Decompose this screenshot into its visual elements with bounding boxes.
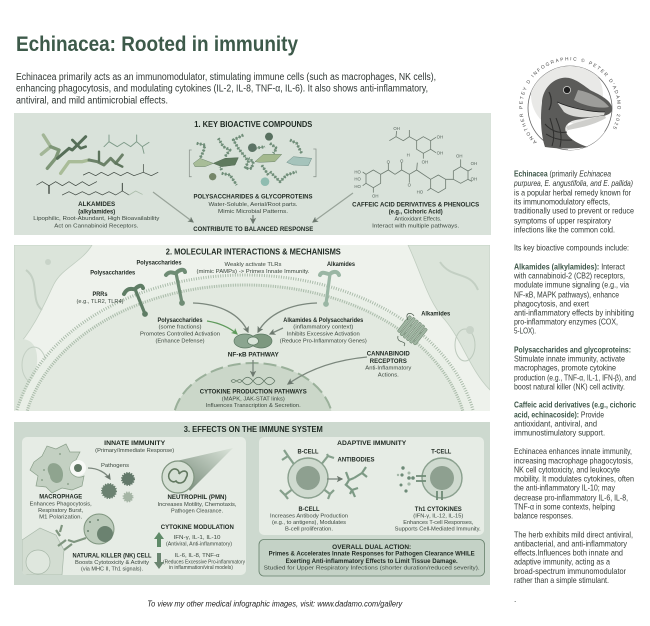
text: alkamides: pro-inflammatory enzymes (COX, xyxy=(514,317,618,327)
text: caffeic acid derivatives xyxy=(352,202,479,230)
text: receptor labels: PRRs xyxy=(92,292,108,298)
arrow: cannabinoid to cytokine xyxy=(288,357,367,384)
intro text: antiviral, and mild antimicrobial effects. xyxy=(16,96,168,106)
arrow: inhibition xyxy=(270,328,283,334)
intro text: enhancing phagocytosis, and modulating cytokines (IL-2, IL-8, TNF-α, IL-6). It also shows anti-inflammatory, xyxy=(16,84,428,94)
text: caffeic acid derivatives: Interact with multiple pathways. xyxy=(372,224,460,230)
callout: overall dual action: Primes & Accelerates Innate Responses for Pathogen Clearance WHILE xyxy=(269,552,475,558)
text: NK cell: Boosts Cytotoxicity & Activity xyxy=(75,560,149,566)
panel: innate immunity xyxy=(22,437,246,575)
icon: caffeic acid molecule: OH xyxy=(437,151,443,156)
text: caffeic acid: immunostimulatory support. xyxy=(514,427,605,437)
text: cytokine modulation: IL-6, IL-8, TNF-α xyxy=(174,553,220,559)
text: immunity: the anti-inflammatory IL-10; may xyxy=(514,483,616,493)
illustration: nucleus xyxy=(174,362,332,411)
text: introduction: infections like the common cold. xyxy=(514,224,615,234)
text: cytokine modulation: IFN-γ, IL-1, IL-10 xyxy=(174,535,220,541)
arrow: antibody release xyxy=(327,478,342,480)
text: Th1 cytokines: Enhances T-cell Responses, xyxy=(403,520,474,526)
icon: caffeic acid molecule: OH xyxy=(393,126,400,131)
text: immunity: increasing macrophage phagocytosis, xyxy=(514,456,633,466)
icon: caffeic acid molecule: O xyxy=(400,158,404,163)
text: cytokine modulation: (Antiviral, Anti-inflammatory) xyxy=(166,542,232,548)
text: innate heading: INNATE IMMUNITY xyxy=(104,441,165,447)
text: immunity: decrease pro-inflammatory IL-6, IL-8, xyxy=(514,492,628,502)
callout: overall dual action: OVERALL DUAL ACTION: xyxy=(332,545,411,551)
text: receptor labels: Polysaccharides xyxy=(90,270,136,276)
text: macrophage: MACROPHAGE xyxy=(39,494,82,500)
text: innate heading xyxy=(95,441,174,454)
text: cytokine pathways: (MAPK, JAK-STAT links) xyxy=(222,396,285,402)
text: receptor labels xyxy=(76,261,451,317)
text: alkamides: NF-κB, MAPK pathways), enhance xyxy=(514,289,619,299)
icon: up arrow xyxy=(154,532,164,547)
illustration: membrane and neighbouring cells xyxy=(14,245,490,411)
text: stray period: . xyxy=(514,594,516,604)
icon: caffeic acid molecule xyxy=(354,126,477,198)
heading: section 2: 2. MOLECULAR INTERACTIONS & MECHANISMS xyxy=(166,248,341,256)
text: Th1 cytokines xyxy=(395,507,481,532)
icon: NK cell and target xyxy=(22,514,114,575)
text: Th1 cytokines: Supports Cell-Mediated Immunity. xyxy=(395,526,481,532)
icon: NF-kB complex xyxy=(234,334,272,348)
panel: key bioactive compounds xyxy=(14,113,491,235)
text: polysaccharides xyxy=(514,344,636,391)
text: inhibition: (inflammatory context) xyxy=(293,325,353,331)
text: polysaccharides: Stimulate innate immunity, activate xyxy=(514,354,625,364)
seal: dinosaur logo: ANOTHER PETEY D INFOGRAPHIC © PETER D'ADAMO 2025 xyxy=(519,57,621,144)
icon: caffeic acid molecule: HO xyxy=(417,189,424,194)
arrow: polysaccharides to response xyxy=(252,215,254,223)
icon: alkamide receptor xyxy=(320,272,339,306)
icon: caffeic acid molecule: HO xyxy=(354,184,361,189)
text: receptor labels: (e.g., TLR2, TLR4) xyxy=(76,299,124,305)
text: receptor labels: Alkamides xyxy=(327,262,356,268)
callout: overall dual action xyxy=(259,540,484,576)
icon: caffeic acid molecule: O xyxy=(408,183,412,188)
text: compounds lead-in: Its key bioactive compounds include: xyxy=(514,243,629,253)
text: receptor labels: Alkamides xyxy=(421,311,451,317)
text: pathogens: Pathogens xyxy=(101,463,129,469)
text: immunity: TNF-α in some contexts, helping xyxy=(514,502,615,512)
text: B cell: (e.g., to antigens), Modulates xyxy=(272,520,346,526)
callout: overall dual action: Studied for Upper Respiratory Infections (shorter duration/reduced severity). xyxy=(264,566,480,572)
text: alkamides: ALKAMIDES xyxy=(78,202,115,208)
text: cytokine modulation: CYTOKINE MODULATION xyxy=(161,525,234,531)
text: cannabinoid receptors: Anti-Inflammatory xyxy=(365,366,411,372)
text: cannabinoid receptors: Actions. xyxy=(378,372,399,378)
intro text: Echinacea primarily acts as an immunomodulator, stimulating immune cells (such as macrophages, NK cells), xyxy=(16,72,436,83)
icon: neutrophil xyxy=(162,448,233,493)
text: NK cell xyxy=(72,553,152,572)
text: cannabinoid receptors: CANNABINOID xyxy=(367,352,410,358)
text: broad spectrum: adaptive immunity, acting as a xyxy=(514,556,610,566)
icon: caffeic acid molecule: HO xyxy=(354,177,361,182)
arrow: alkamides to response xyxy=(153,192,193,222)
text: alkamides: with cannabinoid-2 (CB2) receptors, xyxy=(513,270,625,280)
text: alkamides: Act on Cannabinoid Receptors. xyxy=(54,224,139,230)
text: introduction: its immunomodulatory effects, xyxy=(514,196,610,206)
text: alkamides: phagocytosis, and exert xyxy=(514,298,590,308)
arrow: receptor to NF-kB right xyxy=(258,303,317,332)
text: inhibition xyxy=(280,318,367,344)
heading: section 3: 3. EFFECTS ON THE IMMUNE SYSTEM xyxy=(184,425,323,434)
text: broad spectrum: broad-spectrum immunomodulator xyxy=(514,566,626,576)
icon: caffeic acid molecule: OH xyxy=(437,134,443,139)
text: cell labels: ANTIBODIES xyxy=(338,458,374,464)
text: B cell xyxy=(270,507,348,532)
text: Th1 cytokines: Th1 CYTOKINES xyxy=(415,507,462,513)
icon: down arrow xyxy=(154,553,164,569)
text: inhibition: Alkamides & Polysaccharides xyxy=(283,318,364,324)
text: neutrophil: Increases Motility, Chemotaxis, xyxy=(158,502,237,508)
text: introduction: symptoms of upper respiratory xyxy=(514,215,612,225)
text: inhibition: Inhibits Excessive Activation xyxy=(287,332,360,338)
text: cannabinoid receptors xyxy=(365,352,411,378)
text: caffeic acid xyxy=(514,400,636,437)
icon: DNA xyxy=(231,377,275,385)
text: NF-kB pathway: NF-κB PATHWAY xyxy=(228,352,279,358)
text: neutrophil: Pathogen Clearance. xyxy=(171,508,223,514)
icon: caffeic acid molecule: HO xyxy=(354,169,361,174)
text: cell labels: B-CELL xyxy=(298,450,319,456)
text: polysaccharides: macrophages, promote cytokine xyxy=(514,363,616,373)
icon: caffeic acid molecule: OH xyxy=(422,160,428,165)
text: caffeic acid: acid, echinacoside): Provide xyxy=(514,409,604,419)
icon: antibodies xyxy=(345,467,367,497)
icon: caffeic acid molecule: H xyxy=(407,153,410,158)
text: broad spectrum: antibacterial, and anti-inflammatory xyxy=(514,538,628,548)
text: broad spectrum xyxy=(514,529,633,585)
text: caffeic acid derivatives: (e.g., Cichoric Acid) xyxy=(389,209,443,215)
text: Th1 cytokines: (IFN-γ, IL-12, IL-15) xyxy=(413,513,463,519)
text: cytokine pathways: CYTOKINE PRODUCTION PATHWAYS xyxy=(200,390,307,396)
text: polysaccharides xyxy=(194,195,312,215)
text: B cell: B-cell proliferation. xyxy=(285,526,333,532)
text: innate heading: (Primary/Immediate Response) xyxy=(95,448,174,454)
icon: PRR receptor centre left xyxy=(166,270,185,305)
text: receptor labels: Weakly activate TLRs xyxy=(224,262,282,268)
text: neutrophil xyxy=(158,495,237,514)
text: polysaccharides: Water-Soluble, Aerial/Root parts. xyxy=(208,202,298,208)
text: cytokine modulation: (Reduces Excessive Pro-inflammatory xyxy=(163,559,245,565)
text: B cell: Increases Antibody Production xyxy=(270,513,348,519)
text: macrophage: Enhances Phagocytosis, xyxy=(30,501,92,507)
icon: caffeic acid molecule: OH xyxy=(372,193,378,198)
text: polysaccharides activation: Promotes Controlled Activation xyxy=(140,332,220,338)
text: introduction: Echinacea (primarily Echinacea xyxy=(514,168,611,178)
text: immunity xyxy=(514,446,634,521)
text: cell labels: T-CELL xyxy=(431,450,452,456)
icon: dinosaur head xyxy=(541,78,612,148)
icon: caffeic acid molecule: OH xyxy=(471,177,477,182)
icon: T cell xyxy=(397,458,462,500)
text: NK cell: NATURAL KILLER (NK) CELL xyxy=(72,553,152,559)
text: alkamides: Lipophilic, Root-Abundant, High Bioavailability xyxy=(33,216,160,222)
intro text xyxy=(16,72,436,106)
icon: cannabinoid receptor xyxy=(397,313,428,346)
text: cytokine pathways xyxy=(200,390,307,409)
footer link: To view my other medical infographic images, visit: www.dadamo.com/gallery xyxy=(147,600,403,608)
text: immunity: NK cell cytotoxicity, and leukocyte xyxy=(514,464,620,474)
text: NK cell: (via MHC II, Th1 signals). xyxy=(81,566,143,572)
text: polysaccharides: boost natural killer (NK) cell activity. xyxy=(514,381,625,391)
text: B cell: B-CELL xyxy=(298,507,320,513)
text: polysaccharides: POLYSACCHARIDES & GLYCOPROTEINS xyxy=(194,195,312,201)
text: inhibition: (Reduce Pro-Inflammatory Genes) xyxy=(280,338,367,344)
panel: molecular interactions xyxy=(14,245,490,411)
text: broad spectrum: The herb exhibits mild direct antiviral, xyxy=(514,529,633,539)
text: cytokine pathways: Influences Transcription & Secretion. xyxy=(206,403,301,409)
text: immunity: balance responses. xyxy=(514,511,573,521)
text: immunity: mobility. It modulates cytokines, often xyxy=(514,474,634,484)
text: alkamides: anti-inflammatory effects by inhibiting xyxy=(514,308,634,318)
text: macrophage: Respiratory Burst, xyxy=(38,508,84,514)
text: polysaccharides activation xyxy=(140,318,220,344)
text: caffeic acid derivatives: Antioxidant Effects. xyxy=(394,217,442,223)
text: immunity: Echinacea enhances innate immunity, xyxy=(514,446,632,456)
text: caffeic acid derivatives: CAFFEIC ACID DERIVATIVES & PHENOLICS xyxy=(352,202,479,208)
text: cell labels xyxy=(298,450,452,464)
arrow: to pathogens xyxy=(88,468,110,479)
text: receptor labels: (mimic PAMPs) -> Primes Innate Immunity. xyxy=(196,269,310,275)
text: caffeic acid: antioxidant, antiviral, and xyxy=(514,418,597,428)
panel: effects on the immune system xyxy=(14,422,490,585)
icon: caffeic acid molecule: O xyxy=(387,159,391,164)
text: broad spectrum: rather than a simple stimulant. xyxy=(514,575,609,585)
arrow: receptor to NF-kB left xyxy=(193,303,248,332)
text: adaptive heading: ADAPTIVE IMMUNITY xyxy=(337,441,406,447)
arrow: NF-kB to nucleus xyxy=(252,360,254,376)
icon: B cell xyxy=(280,450,334,499)
text: alkamides xyxy=(33,202,160,230)
icon: PRR receptor left xyxy=(124,286,147,316)
icon: macrophage xyxy=(30,444,86,493)
text column: description xyxy=(513,168,636,604)
text: alkamides: 5-LOX). xyxy=(514,326,536,336)
text: polysaccharides activation: (Enhance Defense) xyxy=(156,338,205,344)
icon: pathogens xyxy=(102,473,134,502)
icon: alkamide molecules xyxy=(37,135,158,195)
text: introduction xyxy=(513,168,634,234)
text: receptor labels: Polysaccharides xyxy=(136,261,182,267)
text: neutrophil: NEUTROPHIL (PMN) xyxy=(168,495,226,501)
callout: overall dual action: Exerting Anti-inflammatory Effects to Limit Tissue Damage. xyxy=(286,559,458,565)
text: polysaccharides activation: Polysaccharides xyxy=(158,318,203,324)
text: alkamides: modulate immune signaling (e.g., via xyxy=(514,280,629,290)
text: polysaccharides: Mimic Microbial Patterns. xyxy=(218,209,288,215)
title: Echinacea: Rooted in immunity xyxy=(16,33,298,56)
text: balanced response: CONTRIBUTE TO BALANCED RESPONSE xyxy=(193,227,313,233)
icon: caffeic acid molecule: OH xyxy=(471,161,477,166)
icon: caffeic acid molecule: OH xyxy=(456,153,462,158)
arrow: caffeic acid to response xyxy=(313,193,353,222)
text: cytokine modulation: in inflammation/viral models) xyxy=(169,565,233,571)
text: introduction: is a popular herbal remedy known for xyxy=(514,187,631,197)
icon: polysaccharide chains xyxy=(189,133,316,186)
text: polysaccharides activation: (some fractions) xyxy=(158,325,202,331)
text: cytokine modulation xyxy=(161,525,245,571)
text: macrophage: M1 Polarization. xyxy=(39,514,83,520)
text: broad spectrum: effects.Influences both innate and xyxy=(514,547,623,557)
text: cannabinoid receptors: RECEPTORS xyxy=(370,359,407,365)
heading: section 1: 1. KEY BIOACTIVE COMPOUNDS xyxy=(194,120,313,129)
text: introduction: traditionally used to prevent or reduce xyxy=(514,206,634,216)
text: macrophage xyxy=(30,494,92,520)
arrow: controlled activation xyxy=(207,321,237,334)
text: alkamides xyxy=(513,262,634,336)
panel: adaptive immunity xyxy=(259,437,484,535)
text: alkamides: (alkylamides) xyxy=(78,209,115,215)
text: alkamides: Alkamides (alkylamides): Interact xyxy=(514,262,626,272)
